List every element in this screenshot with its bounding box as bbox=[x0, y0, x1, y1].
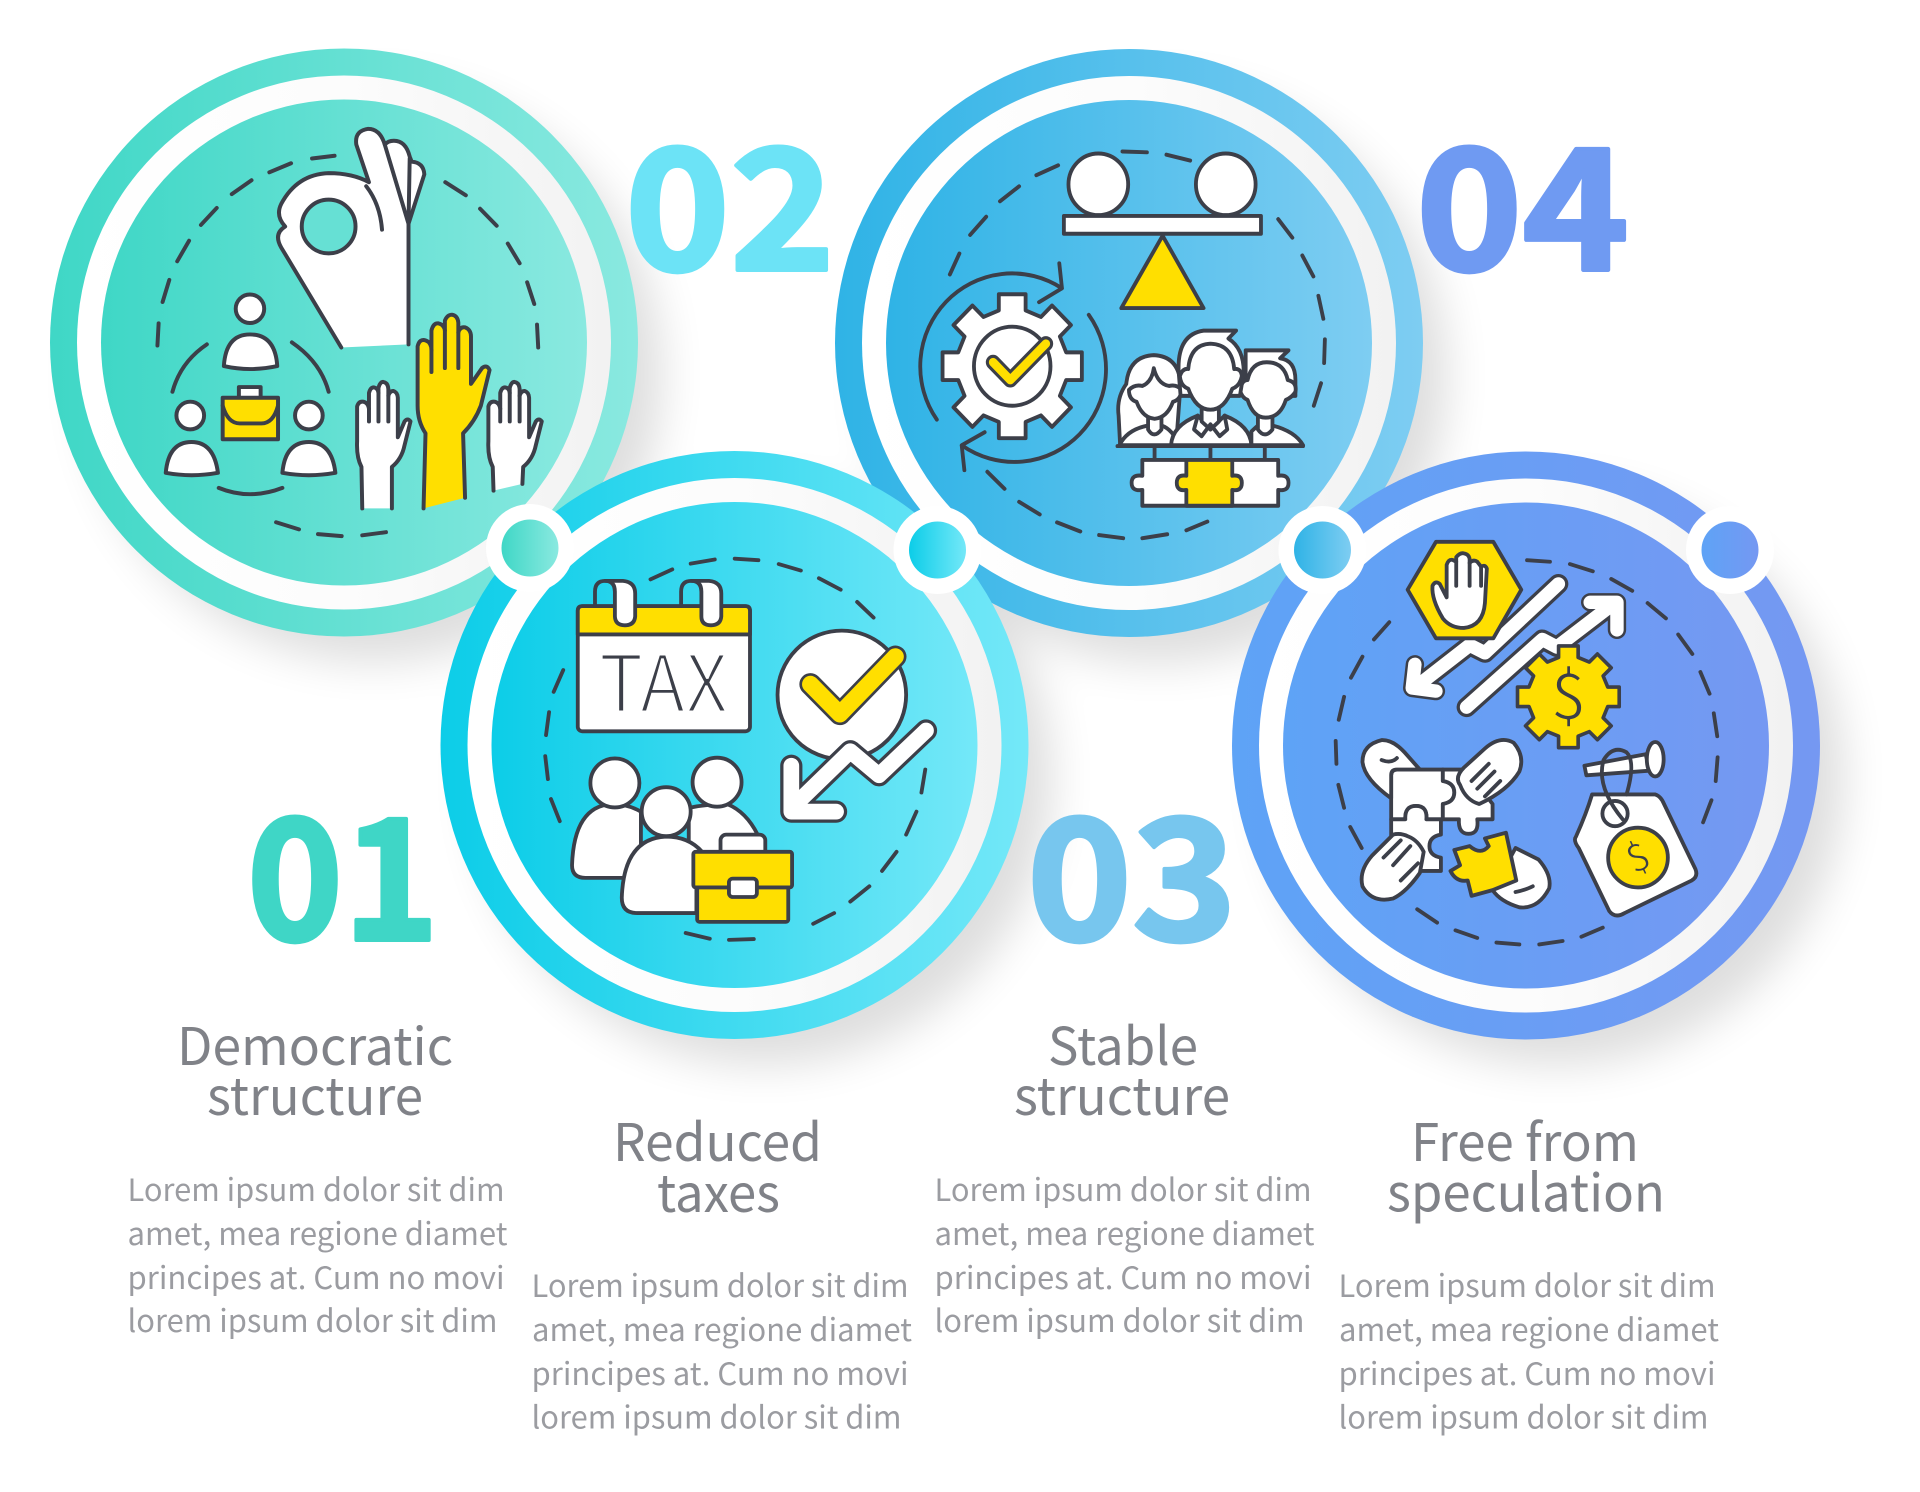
dollar symbol on gear: $ bbox=[1551, 644, 1586, 738]
heading: speculation bbox=[1387, 1152, 1665, 1226]
number 01: 01 bbox=[247, 746, 439, 989]
panel: circle 3 stable structure bbox=[835, 49, 1423, 637]
body copy bbox=[1338, 1261, 1719, 1438]
panel: circle 4 free from speculation bbox=[1232, 452, 1820, 1040]
number 04: 04 bbox=[1416, 76, 1629, 319]
number 03: 03 bbox=[1027, 746, 1237, 989]
heading bbox=[1014, 1005, 1230, 1130]
body copy: Lorem ipsum dolor sit dim bbox=[532, 1261, 908, 1306]
heading: Democratic bbox=[177, 1005, 453, 1080]
body copy: principes at. Cum no movi bbox=[934, 1253, 1312, 1298]
icon: democratic structure group bbox=[157, 129, 542, 536]
heading: Reduced bbox=[613, 1101, 822, 1176]
body copy: lorem ipsum dolor sit dim bbox=[532, 1392, 902, 1438]
calendar label: TAX bbox=[599, 621, 728, 735]
body copy: amet, mea regione diamet bbox=[128, 1209, 508, 1254]
body copy bbox=[934, 1165, 1315, 1341]
body copy: principes at. Cum no movi bbox=[1338, 1349, 1716, 1394]
icon: tax calendar, check, people and briefcase bbox=[545, 559, 926, 940]
body copy: amet, mea regione diamet bbox=[934, 1209, 1315, 1254]
icon: stable structure balance, gear and team bbox=[920, 152, 1325, 538]
body copy: Lorem ipsum dolor sit dim bbox=[934, 1165, 1312, 1210]
text block: free from speculation bbox=[1338, 1101, 1719, 1438]
panel: circle 2 reduced taxes bbox=[440, 451, 1028, 1039]
body copy bbox=[532, 1261, 912, 1438]
body copy: principes at. Cum no movi bbox=[532, 1349, 908, 1394]
body copy: Lorem ipsum dolor sit dim bbox=[1338, 1261, 1716, 1306]
text block: democratic structure bbox=[128, 1005, 508, 1341]
body copy bbox=[128, 1165, 508, 1341]
heading: structure bbox=[207, 1055, 423, 1130]
body copy: amet, mea regione diamet bbox=[1339, 1305, 1719, 1350]
body copy: lorem ipsum dolor sit dim bbox=[128, 1296, 498, 1341]
heading bbox=[613, 1101, 822, 1227]
body copy: principes at. Cum no movi bbox=[128, 1253, 504, 1298]
panel: circle 1 democratic structure bbox=[50, 48, 638, 636]
heading: structure bbox=[1014, 1055, 1230, 1130]
heading bbox=[1387, 1101, 1665, 1226]
body copy: Lorem ipsum dolor sit dim bbox=[128, 1165, 504, 1210]
heading: Free from bbox=[1411, 1101, 1639, 1176]
body copy: lorem ipsum dolor sit dim bbox=[1338, 1392, 1708, 1438]
connector dot: circle 4 end bbox=[1686, 506, 1774, 594]
number 02: 02 bbox=[625, 76, 835, 319]
connector dot: circle 1 to 2 bbox=[486, 504, 574, 592]
heading bbox=[177, 1005, 453, 1130]
heading: Stable bbox=[1048, 1005, 1198, 1080]
connector dot: circle 3 to 4 bbox=[1278, 506, 1366, 594]
body copy: amet, mea regione diamet bbox=[532, 1305, 912, 1350]
text block: stable structure bbox=[934, 1005, 1315, 1341]
icon: stop sign, arrows, gear, puzzle and price tag bbox=[1336, 542, 1718, 944]
body copy: lorem ipsum dolor sit dim bbox=[934, 1296, 1304, 1341]
connector dot: circle 2 to 3 bbox=[894, 506, 982, 594]
dollar symbol on price tag: $ bbox=[1616, 826, 1658, 885]
heading: taxes bbox=[657, 1152, 780, 1227]
text block: reduced taxes bbox=[532, 1101, 912, 1438]
